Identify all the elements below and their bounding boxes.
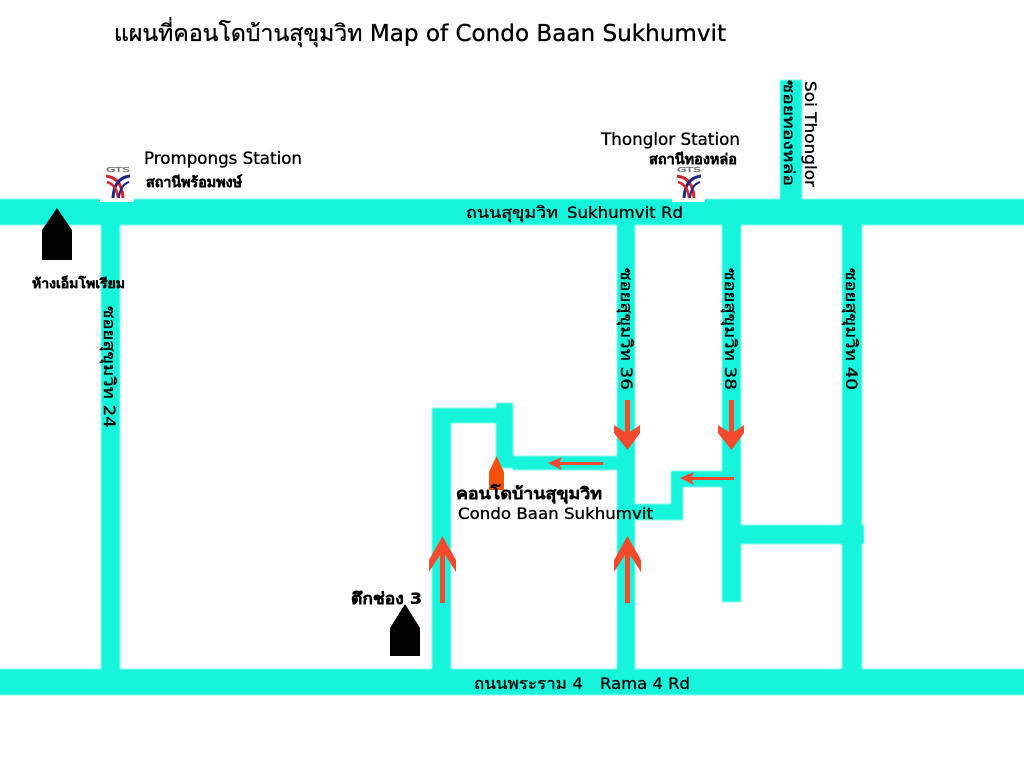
arrow: up soi 36 — [614, 536, 641, 603]
label: Soi 40: ซอยสุขุมวิท 40 — [841, 268, 861, 390]
label: Thonglor Thai: สถานีทองหล่อ — [649, 152, 737, 168]
road: Soi Sukhumvit 40 — [842, 225, 862, 669]
road: connector between 38 and 40 — [741, 525, 864, 544]
label: condo English: Condo Baan Sukhumvit — [458, 504, 653, 523]
icon: GTS logo Prompongs — [106, 166, 131, 198]
road: Soi Sukhumvit 36 — [617, 225, 635, 669]
label: Rama 4 Rd: ถนนพระราม 4 — [474, 674, 583, 693]
icon: GTS logo Prompongs: GTS — [106, 166, 131, 174]
arrow: down soi 36 — [614, 400, 640, 450]
label: Soi Thonglor Thai: ซอยทองหล่อ — [780, 80, 798, 186]
title: แผนที่คอนโดบ้านสุขุมวิท Map of Condo Baan Sukhumvit — [114, 17, 726, 47]
icon: Emporium building — [42, 208, 72, 260]
label: Thonglor Station: Thonglor Station — [600, 130, 740, 149]
station marker background: Prompongs — [100, 160, 134, 202]
label: Sukhumvit Rd — [466, 203, 683, 223]
station marker background: Thonglor — [672, 160, 705, 202]
icon: GTS logo Thonglor — [677, 166, 702, 198]
arrow: up access lane — [429, 536, 456, 603]
label: Rama 4 Rd — [474, 674, 690, 693]
road: lane between 36 and 38 — [635, 471, 722, 520]
label: Sukhumvit Rd: ถนนสุขุมวิท — [466, 203, 558, 223]
road: Sukhumvit Rd — [0, 199, 1024, 225]
arrow: left from soi 38 — [680, 472, 734, 485]
label: Soi 24: ซอยสุขุมวิท 24 — [99, 306, 119, 428]
road: Rama 4 Rd — [0, 669, 1024, 695]
label: Prompongs Thai: สถานีพร้อมพงษ์ — [146, 174, 242, 191]
label: Sukhumvit Rd: Sukhumvit Rd — [567, 203, 683, 222]
label: Rama 4 Rd: Rama 4 Rd — [600, 674, 690, 693]
road: access lane from Rama 4 — [432, 403, 617, 669]
label: condo Thai: คอนโดบ้านสุขุมวิท — [456, 483, 602, 504]
label: Soi 36: ซอยสุขุมวิท 36 — [616, 268, 636, 390]
label: Channel 3: ตึกช่อง 3 — [351, 589, 422, 608]
road: Soi Thonglor — [780, 80, 802, 199]
label: Soi 38: ซอยสุขุมวิท 38 — [720, 268, 740, 390]
icon: condo marker — [489, 456, 504, 490]
road: Soi Sukhumvit 38 — [722, 225, 741, 602]
road: Soi Sukhumvit 24 — [101, 225, 120, 695]
arrow: down soi 38 — [718, 400, 744, 450]
icon: Channel 3 building — [390, 604, 420, 656]
label: Soi Thonglor: Soi Thonglor — [801, 81, 820, 187]
label: Prompongs Station: Prompongs Station — [144, 149, 302, 168]
label: Emporium: ห้างเอ็มโพเรียม — [32, 274, 125, 292]
arrow: left into condo lane — [548, 457, 603, 470]
icon: GTS logo Thonglor: GTS — [677, 166, 702, 174]
